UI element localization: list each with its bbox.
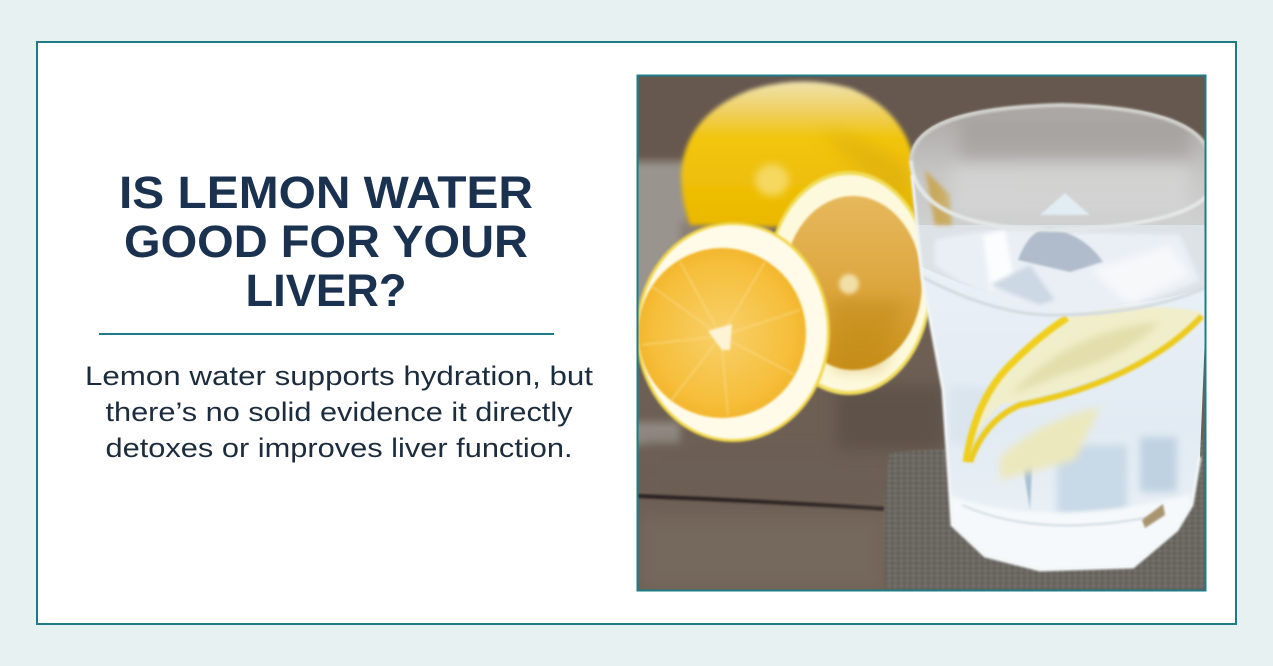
title: [119, 167, 533, 316]
glass rim: [911, 160, 1208, 230]
lemon wedge in glass: [966, 307, 1202, 480]
ice cubes: [935, 230, 1200, 312]
glass of water: [900, 100, 1215, 590]
body text: [85, 361, 594, 463]
bluish lower ice: [1024, 468, 1032, 508]
body text: there’s no solid evidence it directly: [106, 397, 573, 427]
body text: detoxes or improves liver function.: [106, 433, 572, 463]
body text: Lemon water supports hydration, but: [85, 361, 594, 391]
burlap cloth: [884, 440, 1205, 590]
water body: [923, 268, 1204, 570]
photo: lemons and glass of lemon water: [630, 70, 1220, 590]
base of glass: [948, 495, 1192, 570]
title divider: [99, 333, 554, 335]
title: IS LEMON WATER: [119, 167, 533, 218]
title: LIVER?: [246, 265, 406, 316]
whole lemon: [681, 81, 915, 230]
front lemon slice: [636, 222, 830, 442]
back lemon slice: [766, 171, 932, 395]
title: GOOD FOR YOUR: [124, 216, 528, 267]
wooden table background: [630, 70, 1220, 590]
photo border: [638, 76, 1206, 590]
glass upper interior: [910, 106, 1204, 225]
